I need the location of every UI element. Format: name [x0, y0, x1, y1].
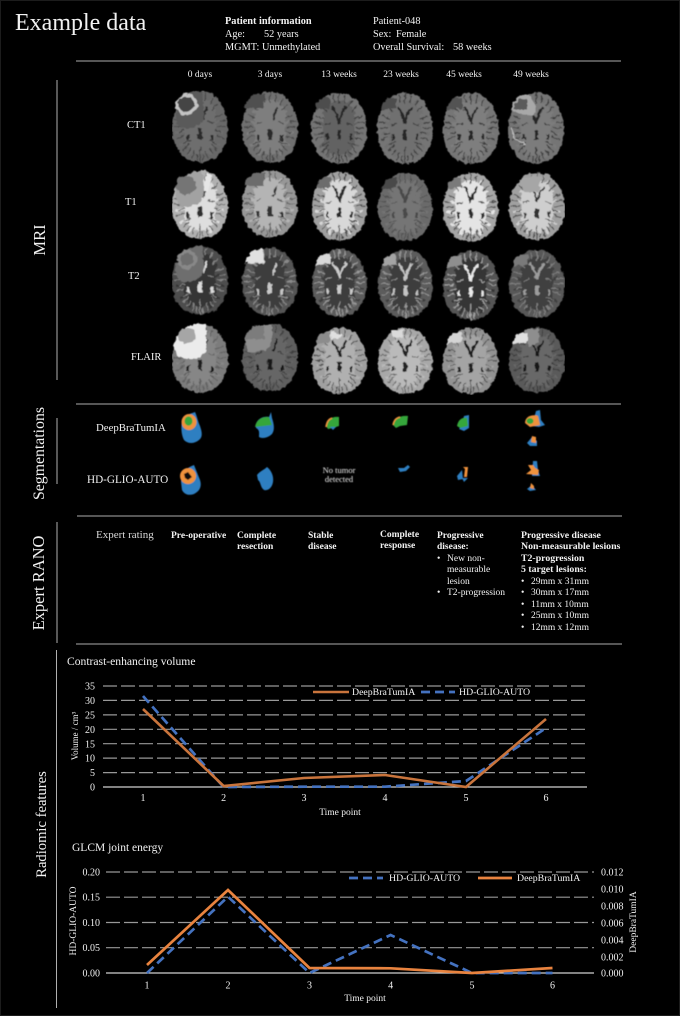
patient information: 58 weeks	[453, 42, 492, 53]
y axis ticks: 5	[90, 768, 95, 779]
brain: CT1 3 days	[242, 92, 298, 163]
time point headers	[188, 70, 549, 80]
legend: HD-GLIO-AUTO	[459, 687, 530, 698]
segmentation method labels: HD-GLIO-AUTO	[87, 474, 168, 486]
RANO ratings: •	[521, 577, 524, 587]
x axis title: Time point	[319, 808, 361, 818]
RANO ratings: Non-measurable lesions	[521, 541, 621, 552]
x axis title: Time point	[344, 994, 386, 1004]
RANO ratings: 5 target lesions:	[521, 564, 587, 575]
brain: FLAIR 23 weeks	[378, 328, 432, 394]
right axis ticks: 0.006	[601, 918, 624, 930]
no tumor note	[323, 465, 356, 484]
y axis ticks: 10	[85, 754, 95, 764]
RANO ratings: 30mm x 17mm	[531, 588, 590, 598]
brain: FLAIR 3 days	[242, 324, 298, 391]
y axis ticks	[85, 682, 95, 794]
time point headers: 3 days	[258, 70, 283, 80]
x axis ticks: 2	[226, 980, 230, 992]
time point headers: 0 days	[188, 70, 213, 80]
right axis ticks: 0.000	[601, 968, 624, 980]
RANO ratings: Progressive disease	[521, 530, 602, 541]
x axis ticks: 4	[382, 793, 388, 804]
mask: HD-GLIO-AUTO 23 weeks	[398, 465, 410, 472]
patient information: Patient-048	[373, 16, 420, 27]
left axis ticks: 0.15	[82, 892, 100, 904]
chart title: GLCM joint energy	[72, 842, 163, 854]
x axis ticks: 3	[307, 980, 312, 992]
right axis title: DeepBraTumIA	[629, 891, 639, 953]
RANO ratings: Pre-operative	[171, 531, 226, 541]
y axis ticks: 30	[85, 696, 95, 707]
RANO ratings: T2-progression	[521, 553, 585, 564]
left axis title: HD-GLIO-AUTO	[69, 886, 79, 955]
RANO ratings: resection	[237, 542, 274, 552]
right axis ticks: 0.012	[601, 868, 624, 878]
brain: T1 45 weeks	[443, 173, 498, 242]
patient information: 52 years	[264, 29, 299, 40]
section label: Expert RANO	[29, 522, 57, 643]
brain: T2 13 weeks	[312, 249, 367, 317]
row: T1	[172, 171, 565, 242]
segmentation method labels: DeepBraTumIA	[96, 422, 166, 434]
y axis ticks: 25	[85, 710, 95, 722]
mask: HD-GLIO-AUTO 0 days	[180, 465, 201, 495]
brain: T2 45 weeks	[443, 251, 498, 320]
brain: T1 0 days	[172, 171, 228, 239]
right axis ticks: 0.010	[601, 884, 624, 896]
mask: DeepBraTumIA 13 weeks	[326, 417, 339, 430]
chart title: Contrast-enhancing volume	[67, 655, 195, 668]
y axis ticks: 35	[85, 682, 95, 692]
series: DeepBraTumIA	[147, 890, 552, 973]
brain: FLAIR 13 weeks	[312, 328, 367, 394]
row: T2	[172, 246, 565, 320]
chart: contrast-enhancing volume	[67, 655, 587, 818]
brain: T2 3 days	[242, 248, 297, 316]
RANO ratings: •	[521, 611, 524, 621]
row: CT1	[172, 91, 564, 164]
brain: T2 0 days	[172, 246, 228, 315]
brain: FLAIR 0 days	[172, 324, 228, 393]
mask: DeepBraTumIA 0 days	[181, 412, 202, 443]
title: Example data	[15, 10, 147, 36]
right axis ticks: 0.002	[601, 952, 624, 964]
section label: Expert RANO: Expert RANO	[29, 535, 48, 630]
left axis ticks: 0.10	[82, 918, 100, 929]
brain: FLAIR 45 weeks	[443, 328, 498, 395]
MRI sequence labels: FLAIR	[131, 352, 161, 363]
section label: MRI: MRI	[30, 224, 49, 256]
RANO ratings: •	[521, 623, 524, 633]
section label: Segmentations	[31, 407, 57, 500]
mask: DeepBraTumIA 49 weeks	[525, 410, 545, 446]
RANO ratings: Complete	[237, 531, 276, 541]
RANO ratings: 25mm x 10mm	[531, 611, 590, 621]
patient information: Sex:	[373, 29, 391, 40]
patient information: Overall Survival:	[373, 42, 444, 53]
x axis ticks: 1	[144, 980, 150, 992]
x axis ticks	[144, 980, 555, 992]
series: HD-GLIO-AUTO	[143, 696, 546, 787]
brain: CT1 49 weeks	[508, 93, 564, 164]
section label: Segmentations: Segmentations	[31, 407, 48, 500]
brain: FLAIR 49 weeks	[509, 328, 565, 393]
right axis ticks	[601, 868, 624, 980]
RANO ratings	[96, 529, 621, 633]
x axis ticks: 2	[221, 793, 226, 804]
RANO ratings: lesion	[447, 577, 470, 587]
legend	[349, 873, 580, 884]
mask: HD-GLIO-AUTO 45 weeks	[457, 467, 468, 482]
RANO ratings: •	[437, 554, 440, 564]
brain: T1 23 weeks	[378, 173, 432, 241]
time point headers: 13 weeks	[321, 70, 357, 80]
segmentation method labels	[87, 422, 168, 486]
RANO ratings: measurable	[447, 565, 490, 575]
section label: Radiomic features: Radiomic features	[34, 771, 50, 878]
left axis ticks	[82, 868, 100, 980]
brain: T1 49 weeks	[509, 173, 565, 240]
MRI sequence labels	[125, 120, 161, 363]
brain: CT1 0 days	[172, 91, 228, 163]
x axis ticks: 6	[550, 980, 555, 992]
y axis ticks: 20	[85, 725, 95, 736]
RANO ratings: disease	[308, 542, 336, 552]
segmentation masks	[180, 410, 545, 495]
mask: DeepBraTumIA 23 weeks	[393, 416, 408, 428]
mask: DeepBraTumIA 45 weeks	[457, 415, 469, 431]
y axis title: Volume / cm³	[70, 711, 80, 760]
left axis ticks: 0.05	[82, 943, 100, 954]
RANO ratings: Stable	[308, 531, 333, 541]
x axis ticks: 5	[470, 980, 474, 992]
left axis ticks: 0.00	[82, 968, 100, 980]
RANO ratings: 29mm x 31mm	[531, 577, 590, 587]
time point headers: 23 weeks	[383, 70, 419, 80]
RANO ratings: Complete	[380, 530, 419, 540]
x axis ticks: 1	[140, 793, 146, 804]
right axis ticks: 0.008	[601, 902, 624, 912]
patient information: Age:	[225, 29, 245, 40]
no tumor note: No tumor	[323, 465, 356, 475]
patient information: Patient information	[225, 16, 312, 27]
brain: T2 49 weeks	[509, 250, 565, 318]
RANO ratings: Expert rating	[96, 529, 154, 541]
RANO ratings: 11mm x 10mm	[531, 600, 589, 610]
brain: CT1 13 weeks	[311, 93, 367, 164]
RANO ratings: Progressive	[437, 531, 484, 541]
x axis ticks: 6	[544, 793, 548, 804]
y axis ticks: 0	[90, 782, 95, 794]
MRI grid	[172, 91, 565, 395]
MRI sequence labels: CT1	[127, 120, 146, 131]
left axis ticks: 0.20	[82, 868, 100, 878]
RANO ratings: •	[521, 588, 524, 598]
right axis ticks: 0.004	[601, 936, 624, 946]
legend	[313, 687, 530, 698]
mask: HD-GLIO-AUTO 49 weeks	[526, 461, 540, 491]
series: HD-GLIO-AUTO	[147, 897, 552, 973]
x axis ticks: 4	[388, 980, 393, 992]
brain: T1 13 weeks	[312, 172, 367, 241]
brain: T2 23 weeks	[378, 250, 433, 318]
brain: T1 3 days	[242, 171, 297, 238]
row: FLAIR	[172, 324, 565, 395]
brain: CT1 45 weeks	[443, 93, 499, 164]
patient information: MGMT: Unmethylated	[225, 42, 321, 53]
brain: CT1 23 weeks	[377, 93, 433, 164]
RANO ratings: T2-progression	[447, 588, 505, 598]
RANO ratings: 12mm x 12mm	[531, 623, 590, 633]
x axis ticks: 5	[464, 793, 468, 804]
legend: DeepBraTumIA	[517, 873, 580, 884]
no tumor note: detected	[325, 474, 354, 484]
gridlines	[106, 872, 594, 948]
x axis ticks: 3	[302, 793, 306, 804]
MRI sequence labels: T1	[125, 197, 137, 208]
patient information: Female	[396, 29, 427, 40]
y axis ticks: 15	[85, 740, 95, 750]
RANO ratings: New non-	[447, 554, 485, 564]
time point headers: 45 weeks	[446, 70, 482, 80]
mask: DeepBraTumIA 3 days	[255, 412, 274, 438]
time point headers: 49 weeks	[513, 70, 549, 80]
patient information	[225, 16, 492, 53]
legend: HD-GLIO-AUTO	[389, 873, 460, 884]
RANO ratings: response	[380, 541, 415, 551]
RANO ratings: •	[521, 600, 524, 610]
gridlines	[103, 686, 587, 773]
legend: DeepBraTumIA	[352, 687, 415, 698]
MRI sequence labels: T2	[128, 271, 140, 282]
RANO ratings: disease:	[437, 542, 469, 552]
mask: HD-GLIO-AUTO 3 days	[257, 467, 273, 490]
x axis ticks	[140, 793, 548, 804]
RANO ratings: •	[437, 588, 440, 598]
series: DeepBraTumIA	[143, 709, 546, 787]
chart: GLCM joint energy	[69, 842, 639, 1004]
